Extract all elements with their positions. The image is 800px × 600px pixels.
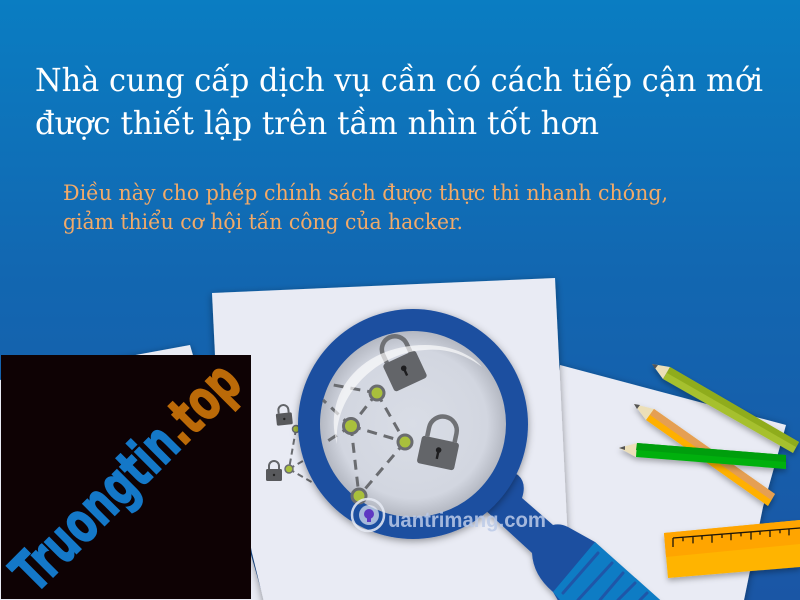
magnifying glass <box>298 309 667 600</box>
pencil: green <box>619 443 786 469</box>
pencil: orange <box>634 404 775 506</box>
pencil: olive <box>652 364 799 453</box>
icon: small padlock lower <box>266 461 282 481</box>
handle stripes <box>553 542 667 600</box>
network inside the lens <box>323 384 412 503</box>
icon: padlock upper <box>373 330 428 392</box>
watermark text: uantrimang.com <box>388 509 546 532</box>
network outside the lens <box>285 425 315 484</box>
icon: small padlock upper <box>275 404 293 426</box>
ruler ticks <box>673 528 800 547</box>
handle <box>470 460 663 600</box>
watermark logo <box>352 499 384 531</box>
title: Nhà cung cấp dịch vụ cần có cách tiếp cận mới <box>35 61 763 99</box>
lens ring <box>298 309 528 539</box>
paper: right sheet <box>540 365 786 600</box>
lens glass <box>320 331 506 517</box>
icon: padlock lower <box>417 413 464 471</box>
watermark <box>352 499 546 532</box>
paper: main sheet <box>212 278 571 600</box>
subtitle: Điều này cho phép chính sách được thực thi nhanh chóng, <box>63 181 668 205</box>
paper: left sheet <box>0 345 267 600</box>
black site badge <box>0 350 254 600</box>
subtitle: giảm thiểu cơ hội tấn công của hacker. <box>63 210 463 234</box>
site name: Truongtin.top <box>0 350 254 600</box>
lens highlight <box>334 345 482 444</box>
title: được thiết lập trên tầm nhìn tốt hơn <box>35 104 599 142</box>
ruler <box>664 520 800 578</box>
